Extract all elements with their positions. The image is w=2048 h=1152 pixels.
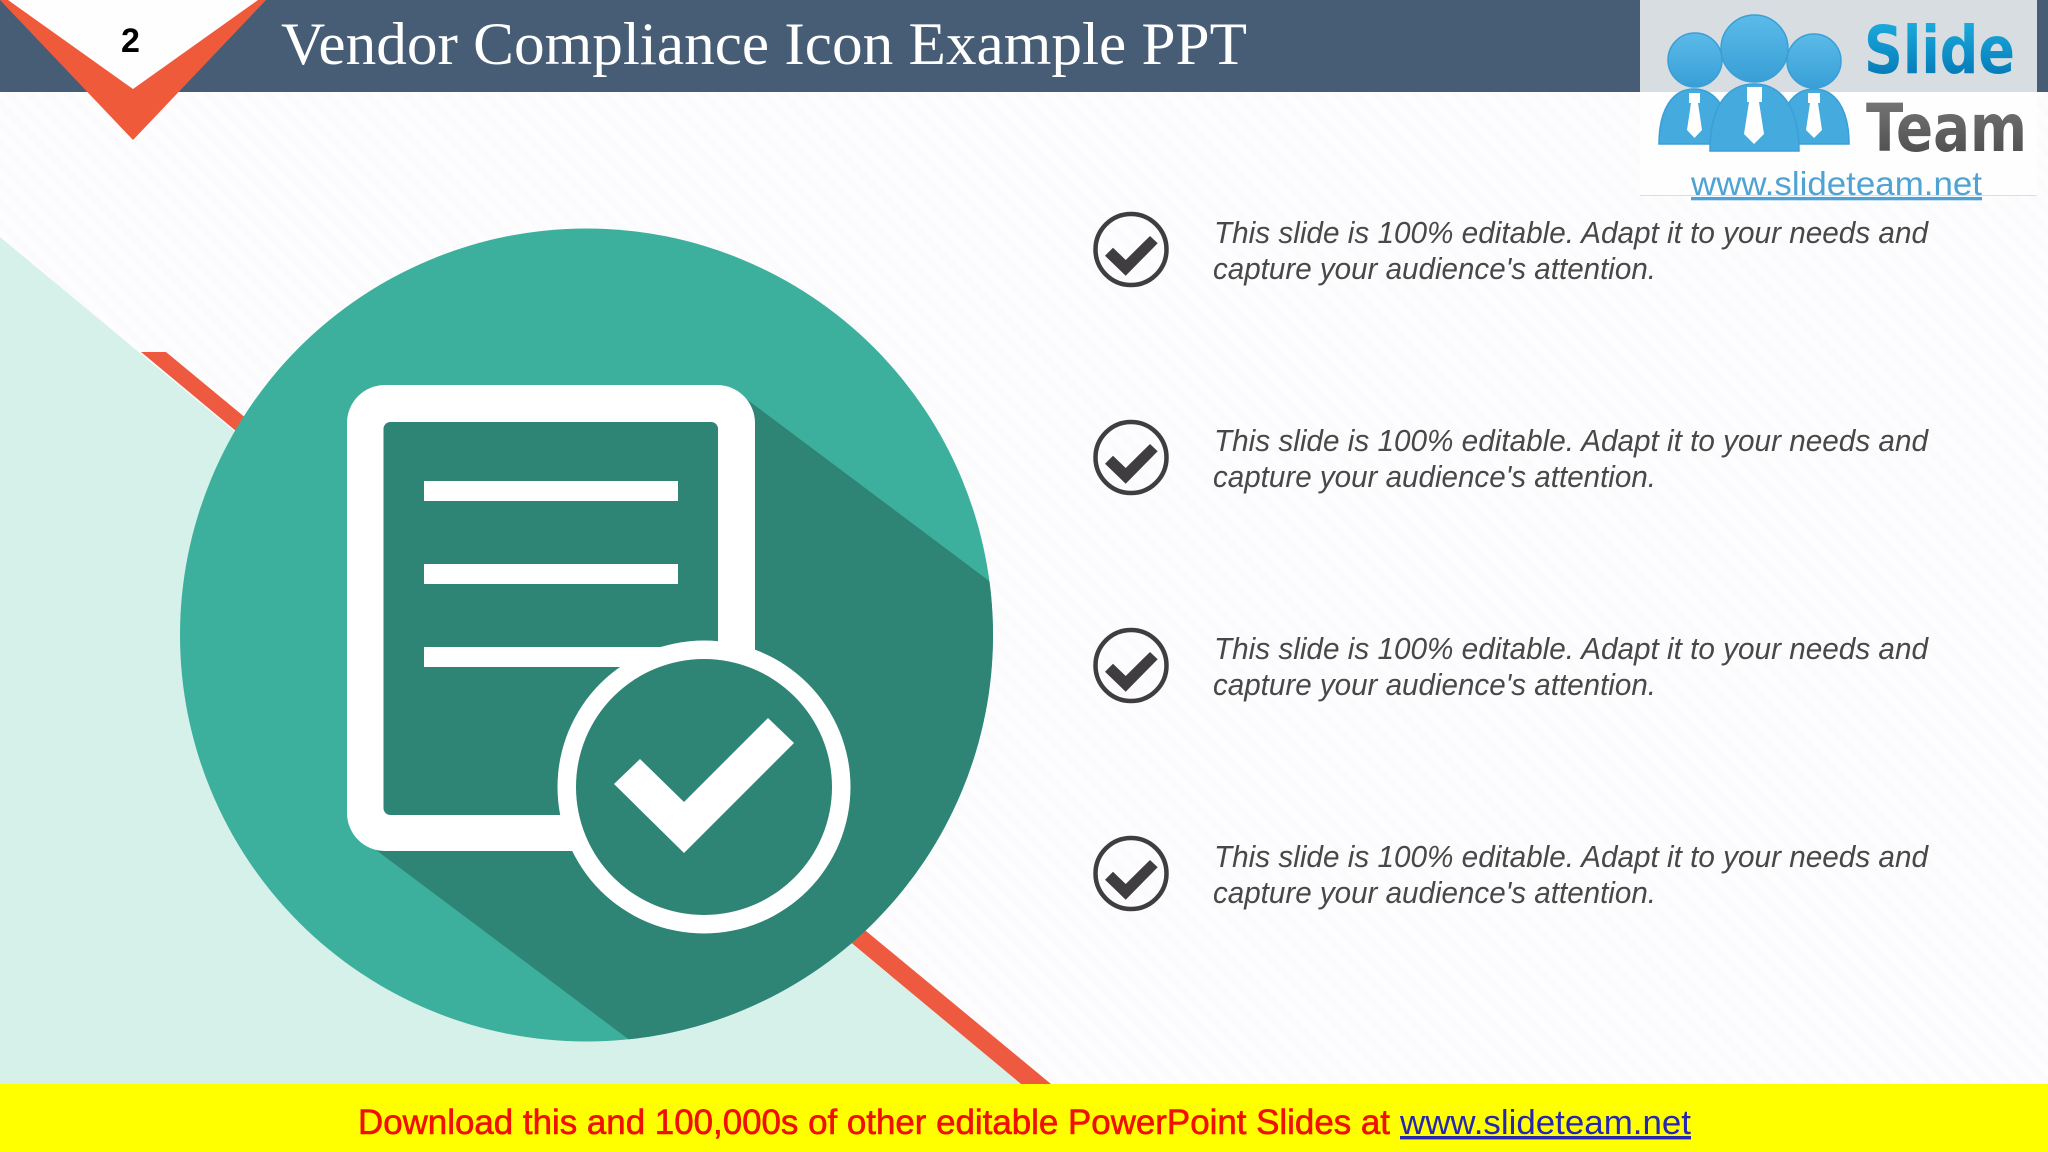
mint diagonal background panel (0, 237, 1021, 1084)
icon: check circle (1096, 630, 1166, 701)
large document icon circle (180, 228, 993, 1042)
long shadow (376, 399, 993, 1040)
list item 4 (1096, 838, 1937, 910)
red diagonal stripe (141, 352, 1051, 1084)
footer banner (0, 1084, 2048, 1152)
text: capture your audience's attention. (1213, 459, 1656, 494)
footer call to action: Download this and 100,000s of other editable PowerPoint Slides at (358, 1103, 1390, 1142)
text: capture your audience's attention. (1213, 251, 1656, 286)
footer link: www.slideteam.net (1399, 1104, 1692, 1142)
text: This slide is 100% editable. Adapt it to your needs and (1214, 631, 1930, 666)
list item 3 (1096, 630, 1937, 702)
document page (384, 422, 718, 815)
icon: check circle (1096, 422, 1166, 493)
document text lines (424, 481, 678, 667)
list item 1 (1096, 214, 1937, 286)
text: This slide is 100% editable. Adapt it to your needs and (1214, 839, 1930, 874)
icon: check circle (1096, 214, 1166, 285)
text: capture your audience's attention. (1213, 667, 1656, 702)
header bar (0, 0, 2048, 92)
logo people (1659, 15, 1849, 151)
text: capture your audience's attention. (1213, 875, 1656, 910)
logo url: www.slideteam.net (1690, 165, 1982, 202)
document outline (347, 385, 755, 851)
check badge (558, 640, 850, 934)
icon: check circle (1096, 838, 1166, 909)
logo word Slide: Slide (1864, 12, 2015, 89)
slide number chevron (0, 0, 266, 140)
slide number: 2 (121, 22, 140, 60)
text: This slide is 100% editable. Adapt it to your needs and (1214, 423, 1930, 458)
logo: SlideTeam (1640, 0, 2037, 202)
list item 2 (1096, 422, 1937, 494)
title: Vendor Compliance Icon Example PPT (281, 11, 1247, 77)
text: This slide is 100% editable. Adapt it to your needs and (1214, 215, 1930, 250)
